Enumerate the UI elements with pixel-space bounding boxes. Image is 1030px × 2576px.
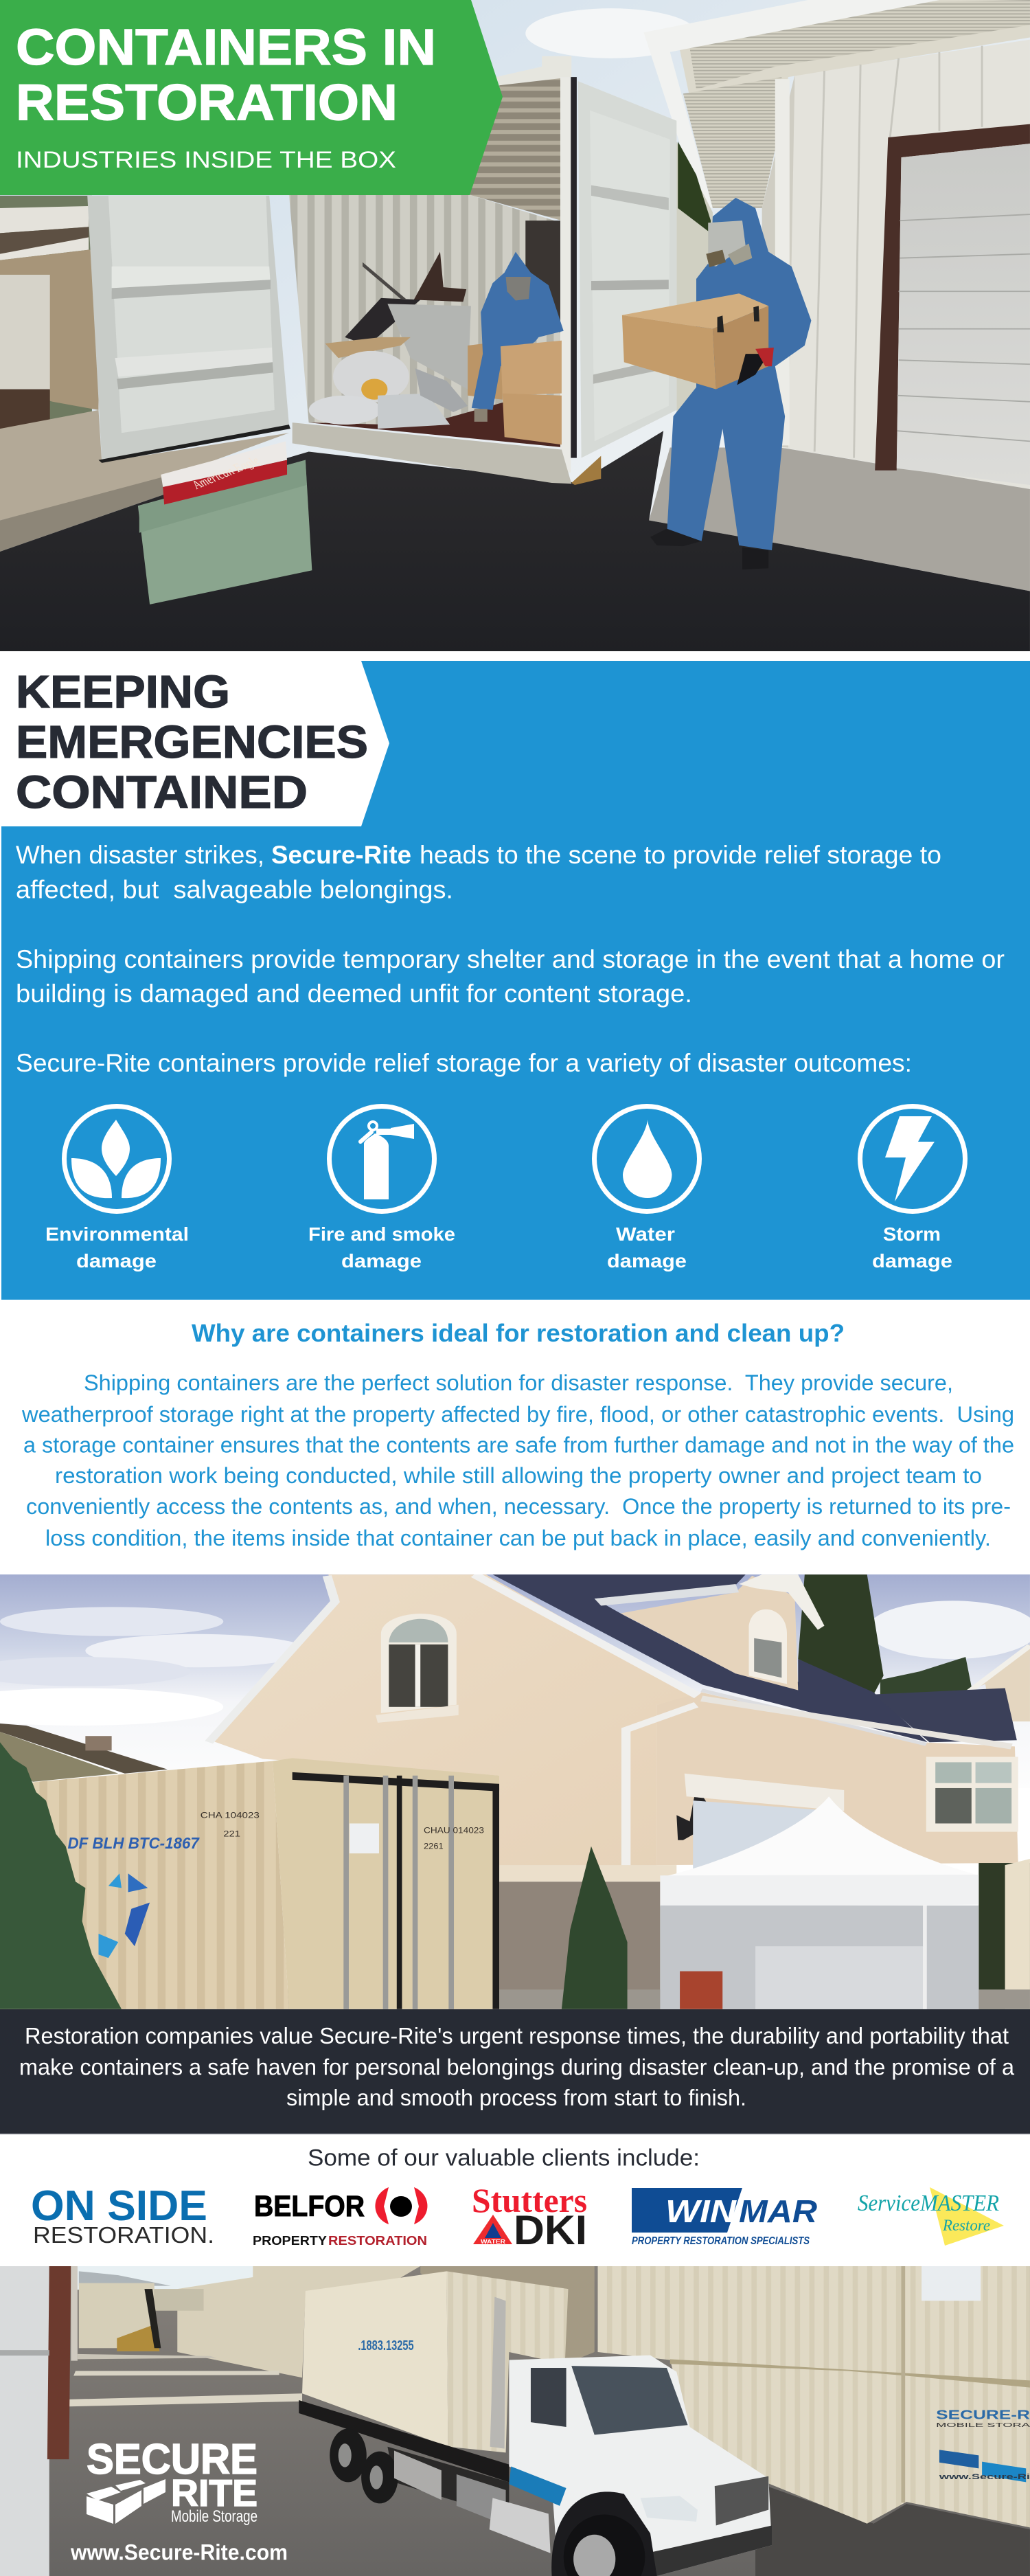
heading tab xyxy=(0,661,389,826)
blue logo xyxy=(98,1873,150,1958)
logo: ServiceMaster Restore: ServiceMASTER xyxy=(858,2191,999,2216)
house xyxy=(209,1574,1018,1871)
label: water damage: Water xyxy=(616,1223,675,1245)
container xyxy=(0,1758,499,2009)
text block: why containers: conveniently access the contents as, and when, necessary. Once the property is returned to its pre- xyxy=(26,1494,1011,1519)
text block: why containers: restoration work being conducted, while still allowing the property owner and project team to xyxy=(55,1463,982,1488)
foundation xyxy=(0,1859,1030,2009)
intro text: Secure-Rite xyxy=(271,841,411,869)
logo: Secure Rite Mobile Storage xyxy=(87,2436,258,2526)
heading: containers in restoration: RESTORATION xyxy=(16,74,398,131)
heading tab: KEEPING xyxy=(16,666,230,718)
left house xyxy=(0,196,289,552)
container lettering xyxy=(68,1811,484,1852)
trees behind xyxy=(798,1574,972,1695)
logo: Belfor: BELFOR xyxy=(254,2190,365,2223)
neighbour roof xyxy=(0,1724,168,1782)
truck xyxy=(299,2271,772,2576)
icon: water drop xyxy=(595,1106,699,1212)
ottoman and paper box xyxy=(138,441,312,605)
heading tab: EMERGENCIES xyxy=(16,716,368,768)
forklift xyxy=(117,2289,161,2351)
logo: Winmar xyxy=(632,2188,817,2247)
subtitle: INDUSTRIES INSIDE THE BOX xyxy=(16,147,396,173)
label: storm damage: damage xyxy=(872,1250,952,1272)
logo: Secure Rite Mobile Storage: RITE xyxy=(171,2472,258,2514)
text block: why containers: a storage container ensures that the contents are safe from further damage and not in the way of the xyxy=(23,1433,1014,1458)
website url: www.Secure-Rite.com xyxy=(70,2540,288,2565)
left containers xyxy=(0,2266,78,2576)
logo: Winmar: WIN xyxy=(665,2193,737,2229)
stacked containers right: MOBILE STORA xyxy=(936,2421,1030,2428)
intro text: When disaster strikes, xyxy=(16,841,264,869)
intro text xyxy=(16,841,1005,1077)
logo: ServiceMaster Restore xyxy=(858,2187,1004,2246)
icon: container blocks xyxy=(87,2479,165,2524)
container lettering: 2261 xyxy=(424,1842,444,1851)
container lettering: CHAU 014023 xyxy=(424,1827,484,1835)
intro text: affected, but salvageable belongings. xyxy=(16,875,453,904)
side window xyxy=(926,1757,1018,1832)
lamp xyxy=(676,1797,706,1840)
label: environmental damage: damage xyxy=(76,1250,157,1272)
text block: why containers: loss condition, the items inside that container can be put back in place, easily and conveniently. xyxy=(45,1526,991,1550)
dormer window xyxy=(749,1609,787,1684)
intro text: Shipping containers provide temporary shelter and storage in the event that a home or xyxy=(16,945,1005,973)
asphalt xyxy=(0,431,1030,653)
right neighbour gable xyxy=(965,1645,1030,1721)
logo: On Side Restoration xyxy=(31,2182,214,2248)
logo: Stutters DKI: Stutters xyxy=(472,2181,587,2219)
white building xyxy=(643,0,1030,591)
heading: containers in restoration: CONTAINERS IN xyxy=(16,19,436,76)
ottoman and paper box: American Eagle xyxy=(187,454,264,492)
label: water damage: damage xyxy=(607,1250,687,1272)
label: environmental damage: Environmental xyxy=(45,1223,189,1245)
label: fire and smoke damage: Fire and smoke xyxy=(308,1223,455,1245)
container lettering: CHA 104023 xyxy=(201,1811,260,1820)
small worker xyxy=(472,252,564,422)
intro text: building is damaged and deemed unfit for content storage. xyxy=(16,980,692,1008)
logo: ServiceMaster Restore: Restore xyxy=(942,2217,990,2234)
icon: fire extinguisher xyxy=(330,1106,434,1212)
photo: container beside a house with a tent xyxy=(0,1572,1030,2009)
logo: Stutters DKI xyxy=(472,2181,587,2253)
logo: Belfor: RESTORATION xyxy=(328,2234,427,2248)
text block: why containers xyxy=(21,1370,1014,1550)
label: storm damage xyxy=(872,1223,952,1272)
label: environmental damage xyxy=(45,1223,189,1272)
logo: Stutters DKI: DKI xyxy=(514,2207,587,2253)
icon: lightning bolt xyxy=(860,1106,965,1212)
intro text: heads to the scene to provide relief storage to xyxy=(420,841,941,869)
text block: why containers: Shipping containers are the perfect solution for disaster response. They provide secure, xyxy=(84,1370,953,1395)
tent xyxy=(660,1796,978,2009)
logo: On Side Restoration: RESTORATION. xyxy=(33,2222,214,2248)
heading: why containers: Why are containers ideal for restoration and clean up? xyxy=(192,1319,845,1347)
heading: containers in restoration xyxy=(16,19,436,131)
label: fire and smoke damage xyxy=(308,1223,455,1272)
heading: clients: Some of our valuable clients include: xyxy=(308,2145,700,2171)
panel: restoration companies: Restoration companies value Secure-Rite's urgent response times, the durability and portability that xyxy=(25,2023,1009,2048)
label: fire and smoke damage: damage xyxy=(341,1250,422,1272)
ground highlights xyxy=(69,2354,302,2406)
logo: Winmar: MAR xyxy=(739,2193,817,2229)
banner: title xyxy=(0,0,503,195)
right ground xyxy=(755,2482,1030,2576)
downspout xyxy=(621,1702,698,1865)
photo: workers loading a storage container xyxy=(0,0,1030,653)
intro text: Secure-Rite containers provide relief storage for a variety of disaster outcomes: xyxy=(16,1049,912,1077)
shrub xyxy=(562,1846,628,2009)
logo: Belfor xyxy=(253,2187,427,2248)
background stacks xyxy=(79,2266,595,2377)
logo: Belfor: PROPERTY xyxy=(253,2234,327,2248)
panel: keeping emergencies contained xyxy=(0,661,1030,1300)
panel: restoration companies xyxy=(0,2009,1030,2134)
icon: environmental damage xyxy=(65,1106,169,1212)
container lettering: DF BLH BTC-1867 xyxy=(68,1834,200,1852)
panel: restoration companies: simple and smooth process from start to finish. xyxy=(286,2085,746,2110)
text block: why containers: weatherproof storage right at the property affected by fire, flood, or other catastrophic events. Using xyxy=(21,1402,1014,1427)
logo: Secure Rite Mobile Storage: Mobile Storage xyxy=(171,2507,258,2526)
logo: Stutters DKI: WATER xyxy=(481,2239,505,2245)
garage door xyxy=(685,1774,844,1871)
truck: .1883.13255 xyxy=(358,2338,414,2353)
upper window xyxy=(376,1614,459,1723)
heading tab: CONTAINED xyxy=(16,767,308,818)
logo: Secure Rite Mobile Storage: SECURE xyxy=(87,2436,258,2483)
photo: Secure-Rite truck in container yard xyxy=(0,2266,1030,2576)
label: storm damage: Storm xyxy=(883,1223,941,1245)
logo: On Side Restoration: ON SIDE xyxy=(31,2182,207,2230)
big worker xyxy=(622,198,811,569)
container xyxy=(87,56,676,485)
stacked containers right xyxy=(598,2266,1030,2527)
container lettering: 221 xyxy=(223,1829,240,1838)
label: water damage xyxy=(607,1223,687,1272)
logo: Winmar: PROPERTY RESTORATION SPECIALISTS xyxy=(632,2235,810,2247)
panel: restoration companies: make containers a safe haven for personal belongings during disaster clean-up, and the promise of a xyxy=(19,2054,1015,2080)
evergreen tree xyxy=(0,1742,122,2009)
